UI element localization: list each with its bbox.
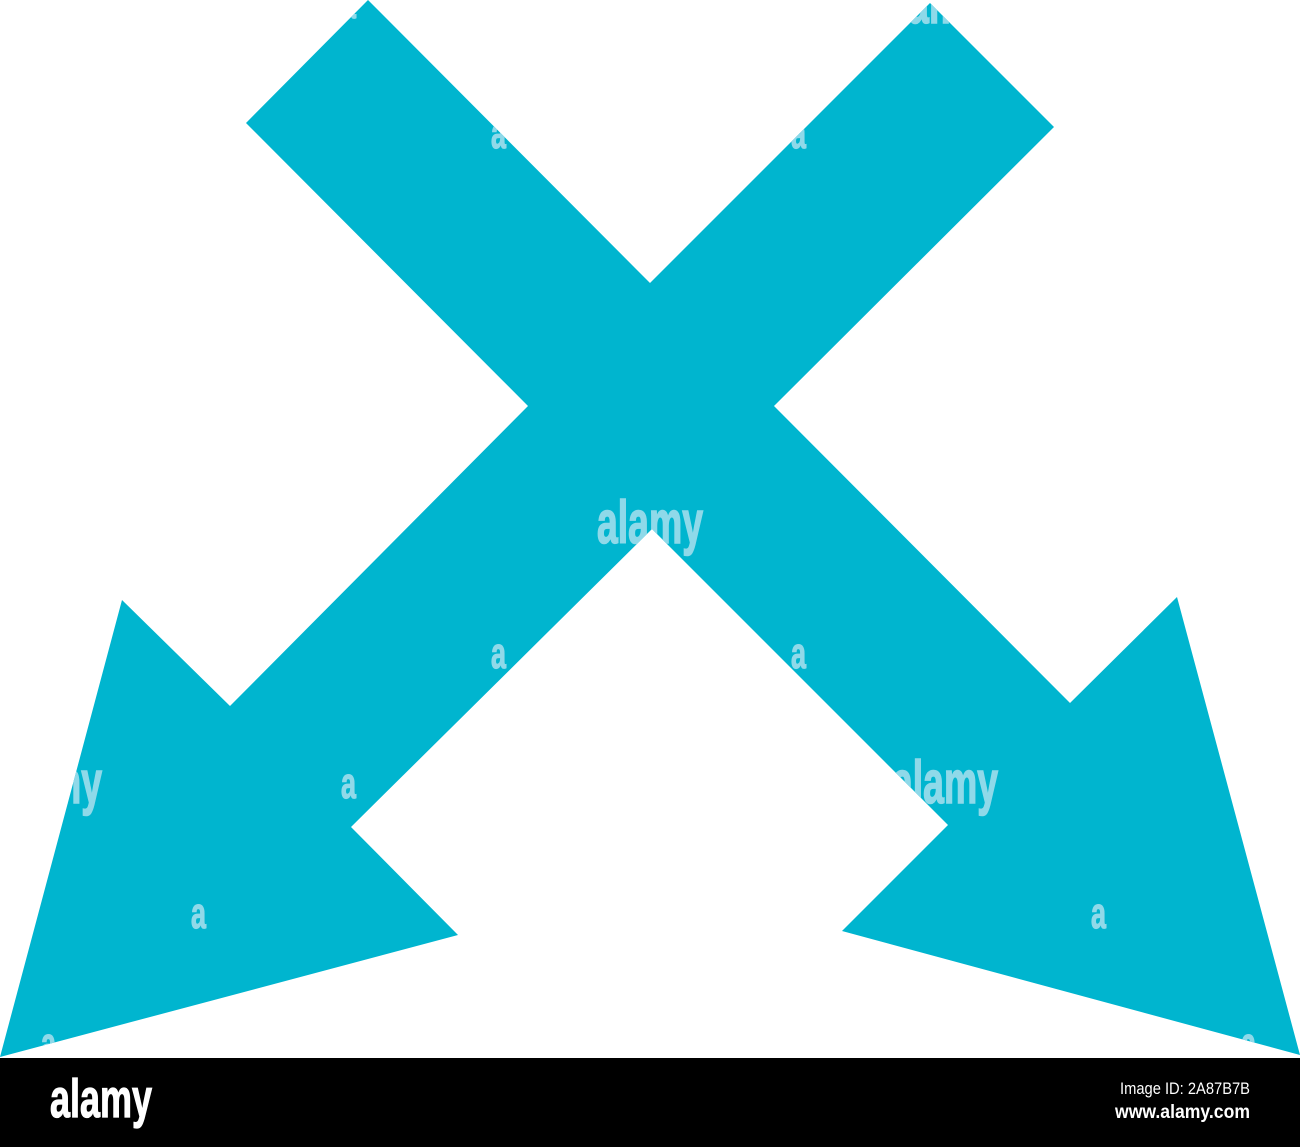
watermark: centre: alamy — [597, 489, 703, 556]
website: www.alamy.com — [1114, 1102, 1250, 1123]
watermark letter: a — [1241, 1019, 1256, 1068]
watermark letter: a — [491, 109, 506, 158]
footer logo: alamy — [50, 1069, 152, 1129]
footer bar — [0, 1058, 1300, 1147]
footer background — [0, 1058, 1300, 1147]
watermark: right arrowhead: alamy — [892, 749, 998, 816]
image id: Image ID: 2A87B7B — [1120, 1079, 1250, 1098]
watermark letter: a — [191, 889, 206, 938]
watermark letter: a — [1091, 889, 1106, 938]
watermark letter: a — [341, 759, 356, 808]
watermark letter: a — [491, 629, 506, 678]
watermark letter: a — [41, 1019, 56, 1068]
watermark letter: a — [791, 109, 806, 158]
watermark letter: a — [791, 629, 806, 678]
watermark: left arrowhead: alamy — [0, 749, 102, 816]
